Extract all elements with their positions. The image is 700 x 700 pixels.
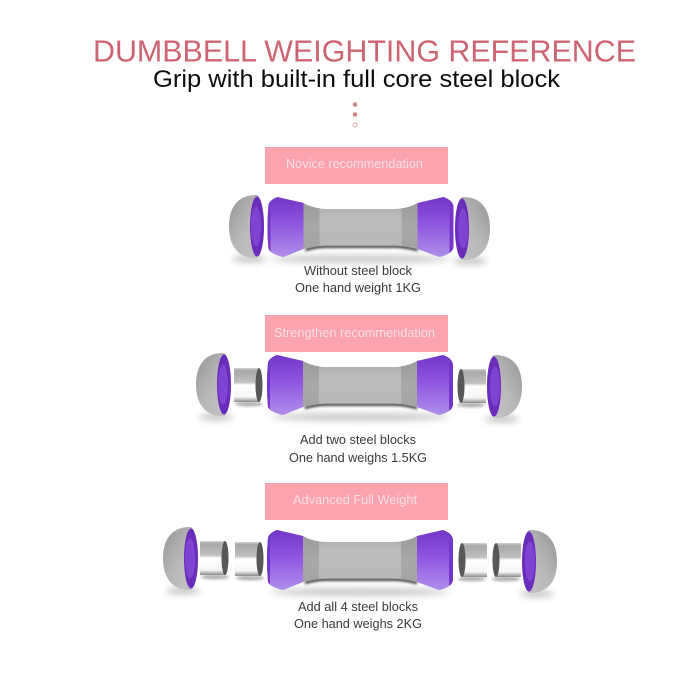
decorative dots [353, 102, 357, 127]
dumbbell: without steel block [229, 195, 490, 264]
caption: novice [295, 264, 421, 295]
banner: novice: Novice recommendation [286, 157, 423, 171]
banner: strengthen: Strengthen recommendation [274, 326, 435, 340]
panel: advanced full weight [163, 483, 557, 631]
banner: strengthen [265, 315, 448, 352]
caption: strengthen: Add two steel blocks [300, 433, 416, 447]
caption: novice: Without steel block [304, 264, 413, 278]
caption: advanced [294, 600, 422, 631]
panel: strengthen recommendation [196, 315, 522, 465]
banner: novice [265, 147, 448, 184]
caption: advanced: One hand weighs 2KG [294, 617, 422, 631]
banner: advanced: Advanced Full Weight [293, 493, 418, 507]
caption: advanced: Add all 4 steel blocks [298, 600, 418, 614]
dumbbell: four steel blocks [163, 527, 557, 597]
dumbbell: two steel blocks [196, 353, 522, 422]
caption: strengthen [289, 433, 427, 465]
caption: novice: One hand weight 1KG [295, 281, 421, 295]
subtitle: Grip with built-in full core steel block [153, 66, 561, 93]
title: DUMBBELL WEIGHTING REFERENCE [93, 34, 636, 68]
banner: advanced [265, 483, 448, 520]
panel: novice recommendation [229, 147, 490, 295]
caption: strengthen: One hand weighs 1.5KG [289, 451, 427, 465]
